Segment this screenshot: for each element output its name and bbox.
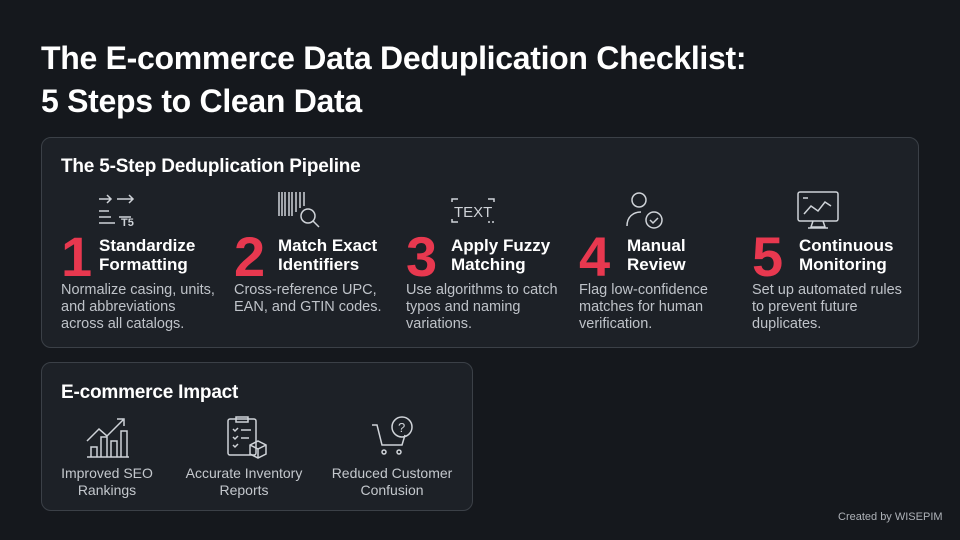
step title 1: Formatting — [99, 255, 188, 274]
label: customer: Confusion — [360, 482, 424, 498]
panel: impact — [41, 362, 473, 511]
step desc 2: Cross-reference UPC, — [234, 282, 377, 298]
icon: cart question — [372, 416, 413, 455]
step desc 1: Normalize casing, units, — [61, 282, 215, 298]
icon: chart — [86, 418, 129, 458]
number 5: 5 — [752, 225, 783, 288]
step title 1 — [99, 236, 195, 274]
step title 3: Apply Fuzzy — [451, 236, 550, 255]
panel: pipeline — [41, 137, 919, 348]
footer credit: Created by WISEPIM — [838, 511, 943, 523]
step title 3 — [451, 236, 550, 274]
label: SEO: Improved SEO — [61, 465, 153, 481]
impact: inventory — [186, 416, 302, 498]
step title 5 — [799, 236, 893, 274]
step title 5: Monitoring — [799, 255, 887, 274]
icon: formatting — [99, 194, 134, 229]
step desc 1: across all catalogs. — [61, 316, 184, 332]
step desc 3: Use algorithms to catch — [406, 282, 558, 298]
impact: SEO — [61, 418, 153, 498]
step 4 — [579, 192, 708, 332]
step desc 1 — [61, 282, 215, 332]
step title 2 — [278, 236, 377, 274]
icon: user check — [626, 192, 663, 229]
label: customer: Reduced Customer — [332, 465, 452, 481]
step desc 5: to prevent future — [752, 299, 858, 315]
step desc 3: typos and naming — [406, 299, 520, 315]
step desc 4: matches for human — [579, 299, 703, 315]
title: The E-commerce Data Deduplication Checklist: — [41, 40, 746, 76]
step title 4: Manual — [627, 236, 686, 255]
icon: clipboard — [227, 416, 267, 459]
icon: barcode — [278, 192, 320, 228]
number 2: 2 — [234, 225, 265, 288]
step 1 — [61, 194, 215, 332]
icon: monitor — [797, 191, 839, 229]
label: inventory: Accurate Inventory — [186, 465, 302, 481]
number 3: 3 — [406, 225, 437, 288]
label: inventory: Reports — [219, 482, 269, 498]
label: customer — [332, 465, 452, 498]
step title 1: Standardize — [99, 236, 195, 255]
step desc 2: EAN, and GTIN codes. — [234, 299, 381, 315]
step title 3: Matching — [451, 255, 526, 274]
step title 2: Match Exact — [278, 236, 377, 255]
step title 5: Continuous — [799, 236, 893, 255]
step 3 — [406, 198, 558, 332]
step desc 4 — [579, 282, 708, 332]
step desc 4: Flag low-confidence — [579, 282, 708, 298]
label: SEO — [61, 465, 153, 498]
title — [41, 40, 746, 119]
step title 2: Identifiers — [278, 255, 359, 274]
step desc 5 — [752, 282, 902, 332]
step desc 4: verification. — [579, 316, 652, 332]
step 2 — [234, 192, 381, 315]
step desc 5: Set up automated rules — [752, 282, 902, 298]
icon: cart question: ? — [398, 420, 405, 435]
step title 4 — [627, 236, 686, 274]
step title 4: Review — [627, 255, 686, 274]
heading: impact: E-commerce Impact — [61, 382, 238, 403]
number 4: 4 — [579, 225, 610, 288]
step desc 3 — [406, 282, 558, 332]
title: 5 Steps to Clean Data — [41, 83, 362, 119]
step desc 2 — [234, 282, 381, 315]
number 1: 1 — [61, 225, 92, 288]
step desc 3: variations. — [406, 316, 472, 332]
icon: formatting: T5 — [121, 217, 134, 229]
step 5 — [752, 191, 902, 332]
label: SEO: Rankings — [78, 482, 136, 498]
step desc 1: and abbreviations — [61, 299, 175, 315]
label: inventory — [186, 465, 302, 498]
heading: pipeline: The 5-Step Deduplication Pipeline — [61, 156, 361, 177]
icon: text: TEXT — [454, 204, 492, 221]
step desc 5: duplicates. — [752, 316, 821, 332]
icon: text — [451, 198, 495, 223]
impact: customer — [332, 416, 452, 498]
